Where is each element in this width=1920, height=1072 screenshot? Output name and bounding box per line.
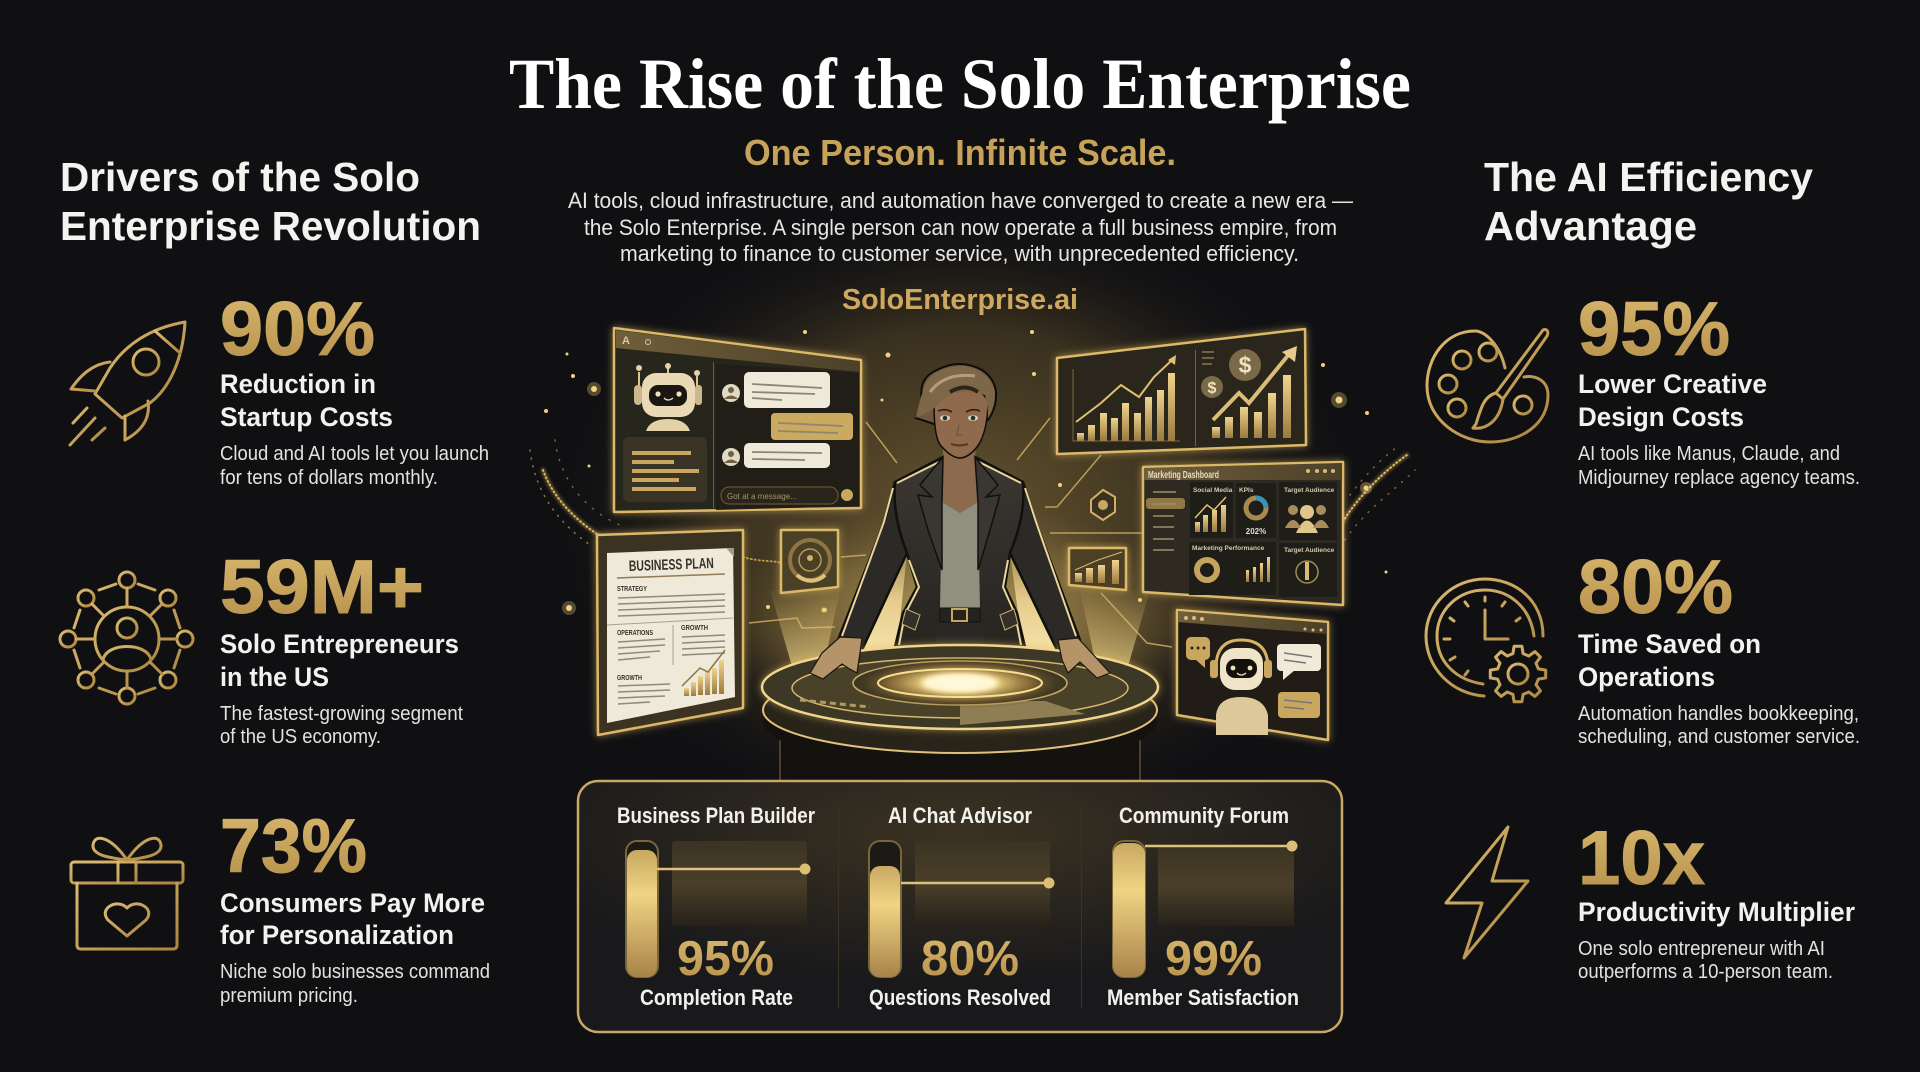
panel: AI chat window: A <box>622 335 630 347</box>
panel: support robot <box>1177 610 1328 740</box>
stat: 80% time saved: Operations <box>1578 662 1715 692</box>
panel: business plan document <box>597 530 743 735</box>
lapels <box>918 457 943 570</box>
metric: community forum: Community Forum <box>1119 803 1289 828</box>
light between arms and torso <box>862 553 1057 650</box>
metric: community forum <box>1107 803 1299 1010</box>
stat: 59M+ solo entrepreneurs: of the US economy. <box>220 726 381 748</box>
stat: 10x productivity <box>1446 816 1855 983</box>
message input: Got at a message... <box>727 492 797 501</box>
panel: marketing dashboard: 202% <box>1246 527 1266 536</box>
title: The Rise of the Solo Enterprise <box>509 44 1411 124</box>
stat: 73% consumers pay more: Niche solo businesses command <box>220 961 490 983</box>
light cones <box>770 590 1150 670</box>
heading: efficiency <box>1484 154 1813 249</box>
panel: business plan document: STRATEGY <box>617 584 647 593</box>
panel: AI chat window <box>614 328 861 512</box>
blazer rim light <box>842 460 1076 645</box>
head <box>916 364 996 458</box>
pockets <box>902 609 1018 630</box>
right bar chart <box>1201 346 1297 438</box>
stat: 95% lower design costs: Design Costs <box>1578 402 1744 432</box>
metric: business plan builder: Completion Rate <box>640 985 793 1010</box>
metric: AI chat advisor: AI Chat Advisor <box>888 803 1032 828</box>
stat: 59M+ solo entrepreneurs: 59M+ <box>220 545 424 630</box>
subtitle: One Person. Infinite Scale. <box>744 132 1176 173</box>
speech bubbles <box>1186 637 1321 718</box>
stat: 10x productivity: 10x <box>1578 816 1705 901</box>
panel: growth charts <box>1057 329 1306 454</box>
stat: 95% lower design costs <box>1427 287 1860 489</box>
stat: 73% consumers pay more: Consumers Pay More <box>220 888 485 918</box>
heading: efficiency: The AI Efficiency <box>1484 154 1813 200</box>
dashboard cells <box>1189 482 1337 597</box>
hands on table <box>810 637 1110 679</box>
intro paragraph: AI tools, cloud infrastructure, and automation have converged to create a new era — <box>568 188 1353 213</box>
stat: 80% time saved <box>1426 545 1860 748</box>
website label: SoloEnterprise.ai <box>842 284 1078 316</box>
metric: community forum: Member Satisfaction <box>1107 985 1299 1010</box>
stat: 73% consumers pay more: 73% <box>220 804 367 889</box>
metric: business plan builder <box>617 803 815 1010</box>
stat: 80% time saved: scheduling, and customer service. <box>1578 726 1860 748</box>
panel: business plan document: BUSINESS PLAN <box>629 555 714 575</box>
panel: marketing dashboard: Social Media <box>1193 487 1233 494</box>
icon: lightning bolt <box>1446 827 1528 958</box>
chat list <box>623 437 707 502</box>
panel: radial widget <box>781 530 838 593</box>
intro paragraph <box>568 188 1353 266</box>
illustration: solo entrepreneur with holographic panels <box>530 328 1415 781</box>
panel: marketing dashboard: Marketing Performance <box>1192 545 1265 552</box>
panel: business plan document: OPERATIONS <box>617 628 653 637</box>
stat: 90% reduction in startup costs <box>70 287 489 489</box>
sparkles <box>544 330 1388 615</box>
right bar chart: $ <box>1239 352 1252 378</box>
stat: 95% lower design costs: AI tools like Manus, Claude, and <box>1578 443 1840 465</box>
stat: 95% lower design costs: Lower Creative <box>1578 369 1767 399</box>
panel: marketing dashboard: KPIs <box>1239 487 1254 494</box>
stat: 10x productivity: Productivity Multiplier <box>1578 897 1855 927</box>
panel: marketing dashboard: Target Audience <box>1284 487 1335 494</box>
icon: palette and brush <box>1427 329 1548 442</box>
stat: 90% reduction in startup costs: Startup Costs <box>220 402 393 432</box>
stat: 80% time saved: Automation handles bookkeeping, <box>1578 703 1859 725</box>
stat: 10x productivity: One solo entrepreneur with AI <box>1578 938 1825 960</box>
stat: 90% reduction in startup costs: 90% <box>220 287 375 372</box>
table pedestal <box>780 735 1140 781</box>
right bar chart: $ <box>1208 380 1217 397</box>
panel: product metrics <box>578 781 1342 1032</box>
round holographic table <box>762 645 1158 767</box>
panel: marketing dashboard: Marketing Dashboard <box>1148 469 1219 481</box>
stat: 73% consumers pay more: for Personalization <box>220 920 454 950</box>
panel: marketing dashboard <box>1143 462 1343 605</box>
robot with headset <box>1210 640 1272 735</box>
icon: rocket <box>70 322 185 445</box>
panel: business plan document: GROWTH <box>681 623 708 632</box>
shirt <box>940 502 980 608</box>
blazer body <box>894 457 1025 647</box>
stat: 80% time saved: 80% <box>1578 545 1733 630</box>
intro paragraph: marketing to finance to customer service, with unprecedented efficiency. <box>620 241 1299 266</box>
message input <box>721 487 853 504</box>
metric: AI chat advisor <box>869 803 1054 1010</box>
stat: 59M+ solo entrepreneurs <box>60 545 463 748</box>
chat bubbles <box>722 372 853 468</box>
stat: 90% reduction in startup costs: Cloud and AI tools let you launch <box>220 443 489 465</box>
icon: clock and gear <box>1426 579 1546 702</box>
panel: marketing dashboard: Target Audience <box>1284 547 1335 554</box>
metric: business plan builder: Business Plan Builder <box>617 803 815 828</box>
heading: drivers <box>60 154 481 249</box>
stat: 59M+ solo entrepreneurs: Solo Entrepreneurs <box>220 629 459 659</box>
stat: 73% consumers pay more: premium pricing. <box>220 985 358 1007</box>
stat: 10x productivity: outperforms a 10-person team. <box>1578 961 1833 983</box>
panel: small bar chart <box>1069 548 1126 590</box>
heading: drivers: Enterprise Revolution <box>60 203 481 249</box>
stat: 95% lower design costs: 95% <box>1578 287 1730 372</box>
robot avatar <box>634 363 702 431</box>
stat: 90% reduction in startup costs: Reduction in <box>220 369 376 399</box>
connector lines <box>749 418 1172 647</box>
metric: AI chat advisor: 80% <box>921 932 1019 986</box>
metric: AI chat advisor: Questions Resolved <box>869 985 1051 1010</box>
icon: hexagon gem <box>1091 490 1115 520</box>
metric: business plan builder: 95% <box>677 932 774 986</box>
stat: 80% time saved: Time Saved on <box>1578 629 1761 659</box>
panel: business plan document: GROWTH <box>617 673 642 682</box>
skin <box>942 445 978 513</box>
figure: entrepreneur <box>838 364 1080 650</box>
trousers <box>935 622 985 647</box>
gold dust waves <box>530 440 1415 563</box>
icon: gift box <box>71 838 183 949</box>
belt <box>940 608 980 622</box>
heading: drivers: Drivers of the Solo <box>60 154 420 200</box>
stat: 59M+ solo entrepreneurs: in the US <box>220 662 329 692</box>
icon: network person <box>60 572 193 704</box>
metric: community forum: 99% <box>1165 932 1262 986</box>
sleeves <box>838 482 910 650</box>
intro paragraph: the Solo Enterprise. A single person can now operate a full business empire, from <box>584 215 1337 240</box>
stat: 73% consumers pay more <box>71 804 490 1007</box>
heading: efficiency: Advantage <box>1484 203 1697 249</box>
left bar chart <box>1073 355 1180 441</box>
stat: 59M+ solo entrepreneurs: The fastest-growing segment <box>220 703 463 725</box>
stat: 95% lower design costs: Midjourney replace agency teams. <box>1578 467 1860 489</box>
stat: 90% reduction in startup costs: for tens of dollars monthly. <box>220 467 438 489</box>
